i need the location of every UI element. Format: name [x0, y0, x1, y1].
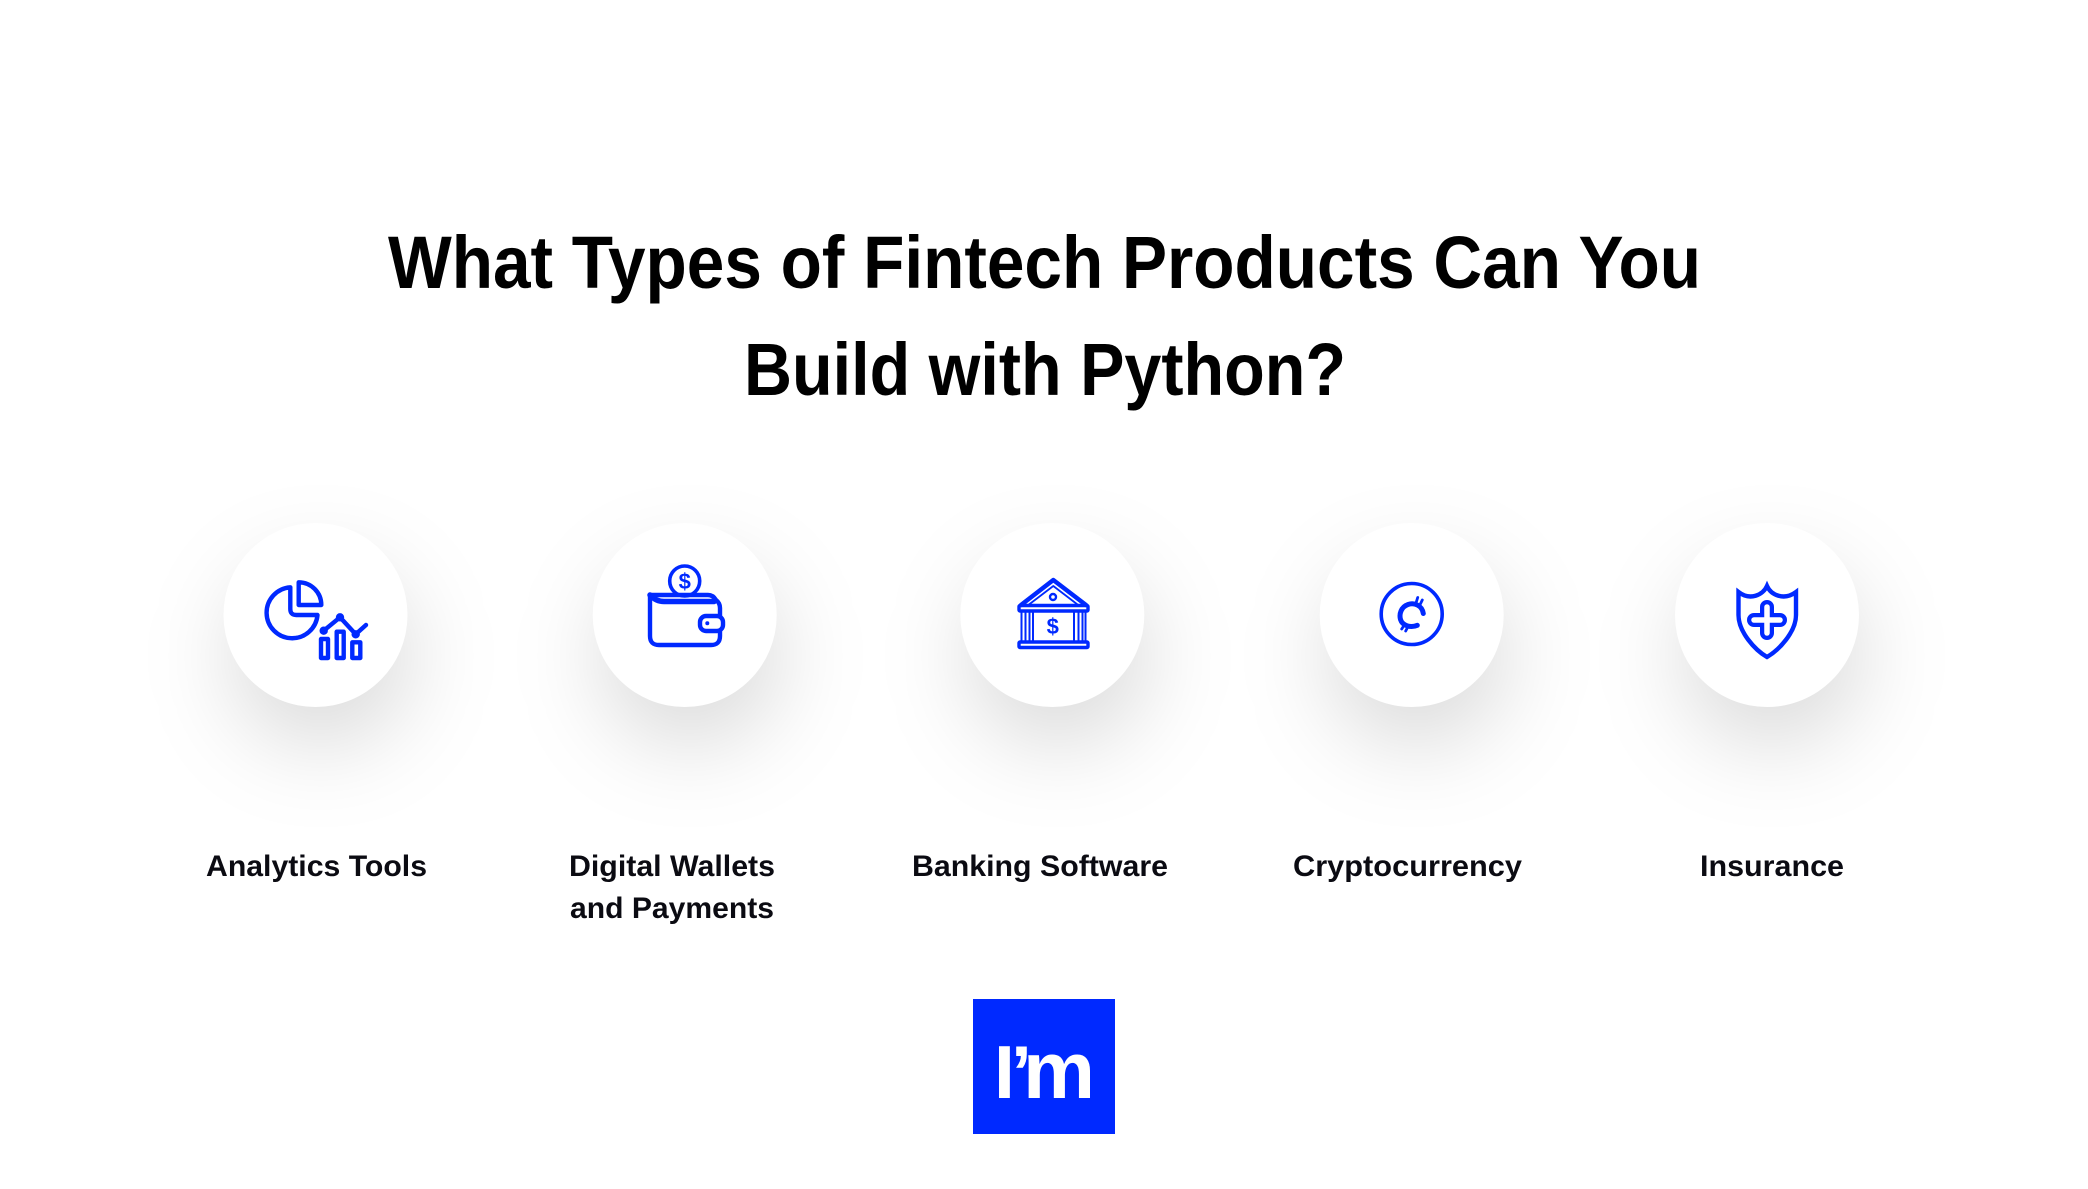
logo: I — [994, 1030, 1015, 1114]
panel: banking software — [912, 523, 1168, 883]
circle: digital wallets — [593, 523, 777, 707]
title: Build with Python? — [744, 328, 1346, 411]
icon: bank building — [1019, 580, 1088, 648]
panel: insurance — [1675, 523, 1862, 883]
label: digital wallets and payments: Digital Wallets — [569, 850, 775, 883]
circle: banking software — [960, 523, 1144, 707]
panel: digital wallets and payments — [569, 523, 780, 925]
panel: cryptocurrency — [1293, 523, 1522, 883]
label: digital wallets and payments — [569, 850, 775, 925]
icon: bank building: $ — [1047, 614, 1059, 639]
title: What Types of Fintech Products Can You — [388, 221, 1701, 304]
label: analytics tools: Analytics Tools — [206, 850, 427, 883]
label: banking software: Banking Software — [912, 850, 1168, 883]
icon: wallet with coin — [650, 566, 723, 645]
logo: m — [1023, 1026, 1095, 1116]
circle: analytics tools — [224, 523, 408, 707]
title — [388, 221, 1701, 411]
icon: shield with cross — [1738, 586, 1796, 657]
logo: ’ — [1011, 1030, 1032, 1114]
icon: crypto coin — [1381, 584, 1442, 644]
circle: cryptocurrency — [1320, 523, 1504, 707]
label: digital wallets and payments: and Payments — [570, 892, 774, 925]
label: insurance: Insurance — [1700, 850, 1844, 883]
label: cryptocurrency: Cryptocurrency — [1293, 850, 1522, 883]
icon: pie and bar charts — [267, 582, 366, 658]
logo — [973, 999, 1115, 1134]
panel: analytics tools — [206, 523, 427, 883]
icon: wallet with coin: $ — [679, 569, 691, 594]
circle: insurance — [1675, 523, 1859, 707]
